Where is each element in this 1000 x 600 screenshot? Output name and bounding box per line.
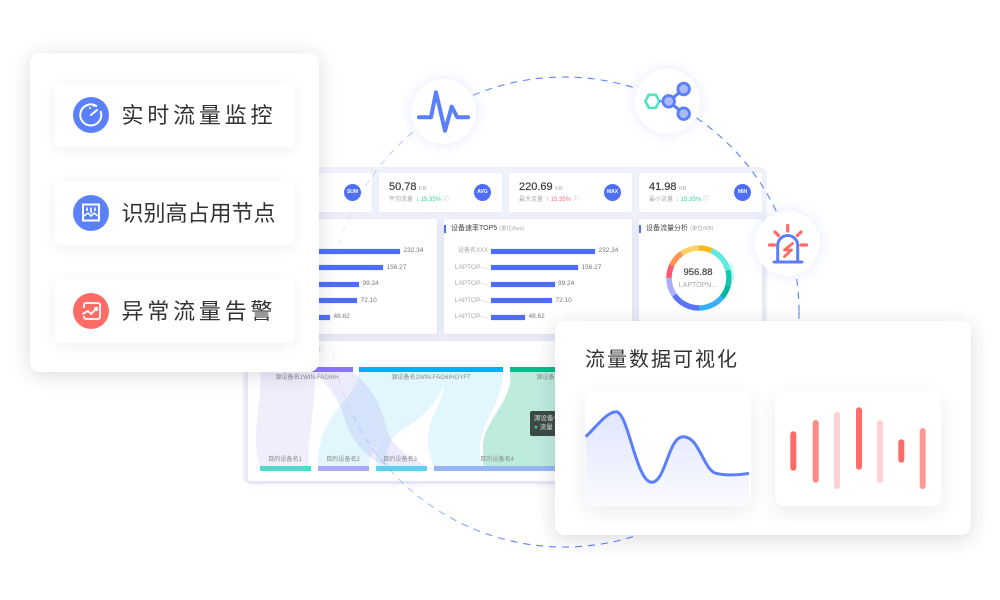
badge: MAX: MAX	[607, 189, 618, 195]
feature text: 异常流量告警	[122, 299, 276, 324]
bars: left chart	[319, 247, 424, 320]
feature: real-time monitoring	[55, 83, 294, 147]
stat card: minimum	[639, 173, 762, 212]
target label 2: 目的设备名2	[326, 456, 360, 463]
bar rows: 72.10	[556, 296, 572, 304]
area line chart	[585, 410, 750, 492]
icon: radar	[73, 97, 109, 133]
tooltip title: 源设备名	[534, 415, 560, 422]
panel: device traffic analysis	[639, 219, 762, 334]
feature: identify high usage nodes	[55, 181, 294, 245]
bar rows: 48.62	[528, 313, 545, 320]
panel: left bar chart	[248, 219, 437, 334]
bars: left chart: 156.27	[386, 264, 406, 270]
pulse line	[417, 90, 470, 133]
target label 4: 目的设备名4	[480, 456, 514, 463]
stat card: sum	[243, 173, 372, 212]
panel title: 设备流量分析 (单位/KB)	[646, 225, 713, 232]
alarm light	[768, 224, 808, 264]
stat card: maximum	[509, 173, 632, 212]
bar rows	[455, 246, 618, 320]
panel heading: 流量数据可视化	[585, 348, 739, 370]
target label 3: 目的设备名3	[383, 456, 417, 463]
card: line chart	[585, 391, 751, 506]
bar rows: LAPTOP-...	[455, 280, 488, 287]
bars: left chart: 72.10	[360, 296, 377, 304]
panel: features list	[30, 53, 319, 372]
feature text: 实时流量监控	[122, 103, 276, 128]
donut chart	[666, 245, 734, 311]
source label 3: 源设备名3W	[536, 374, 570, 381]
badge: AVG: AVG	[477, 189, 488, 195]
panel marker	[639, 225, 641, 233]
tooltip value: ● 流量 :	[534, 424, 556, 431]
bubble icon: network nodes	[635, 69, 700, 134]
feature: abnormal traffic alert	[55, 279, 294, 343]
caption: minimum: 最小流量 ↓ 15.35% ⓘ	[649, 197, 709, 203]
value: average: 50.78 KB	[389, 181, 426, 193]
panel title: 设备速率TOP5 (单位/bps)	[451, 225, 524, 232]
caption: maximum: 最大流量 ↑ 15.35% ⓘ	[519, 197, 579, 203]
target label 1: 目的设备名1	[268, 456, 302, 463]
bar rows: LAPTOP-...	[455, 264, 488, 270]
icon: chart window	[73, 195, 109, 231]
bars: left chart: 99.24	[362, 280, 379, 287]
badge: MIN	[734, 184, 751, 201]
value: minimum: 41.98 KB	[649, 181, 686, 193]
source label 1: 源设备名1WIN-FAG6IH	[275, 374, 339, 381]
stat card: average	[379, 173, 502, 212]
icon: trend alert	[73, 293, 109, 329]
badge: AVG	[474, 184, 491, 201]
bubble icon: pulse	[411, 79, 476, 144]
bubble icon: alarm	[755, 211, 820, 276]
bars: left chart: 48.62	[334, 313, 350, 320]
bar rows: 232.34	[598, 247, 618, 254]
badge: SUM	[344, 184, 361, 201]
panel marker	[444, 225, 446, 233]
source label 2: 源设备名2WIN-FAG6IHGYFT	[391, 374, 471, 381]
caption: average: 平均流量 ↓ 15.35% ⓘ	[389, 197, 449, 203]
bar rows: 156.27	[582, 264, 601, 270]
badge: SUM: SUM	[347, 189, 358, 195]
badge: MAX	[604, 184, 621, 201]
info icon: ⓘ	[316, 347, 323, 354]
bar rows: 99.24	[558, 280, 574, 287]
feature text: 识别高占用节点	[122, 201, 276, 226]
card: bar chart	[775, 391, 941, 506]
bar rows: LAPTOP-...	[455, 313, 488, 320]
donut label: LAPTOPN...	[679, 282, 717, 288]
donut value: 956.88	[683, 267, 713, 278]
panel: sankey chart	[248, 341, 764, 481]
tooltip	[530, 411, 570, 436]
panel: data visualization	[555, 321, 971, 535]
vertical rounded bars	[790, 407, 926, 489]
bar rows: 设备名XXX	[458, 248, 488, 254]
value: maximum: 220.69 KB	[519, 181, 562, 193]
dashboard screenshot	[243, 167, 767, 484]
bars: left chart: 232.34	[404, 247, 423, 254]
bar rows: LAPTOP-...	[455, 296, 488, 304]
badge: MIN: MIN	[738, 189, 747, 195]
node graph	[644, 82, 691, 121]
panel: device rate TOP5	[444, 219, 632, 334]
